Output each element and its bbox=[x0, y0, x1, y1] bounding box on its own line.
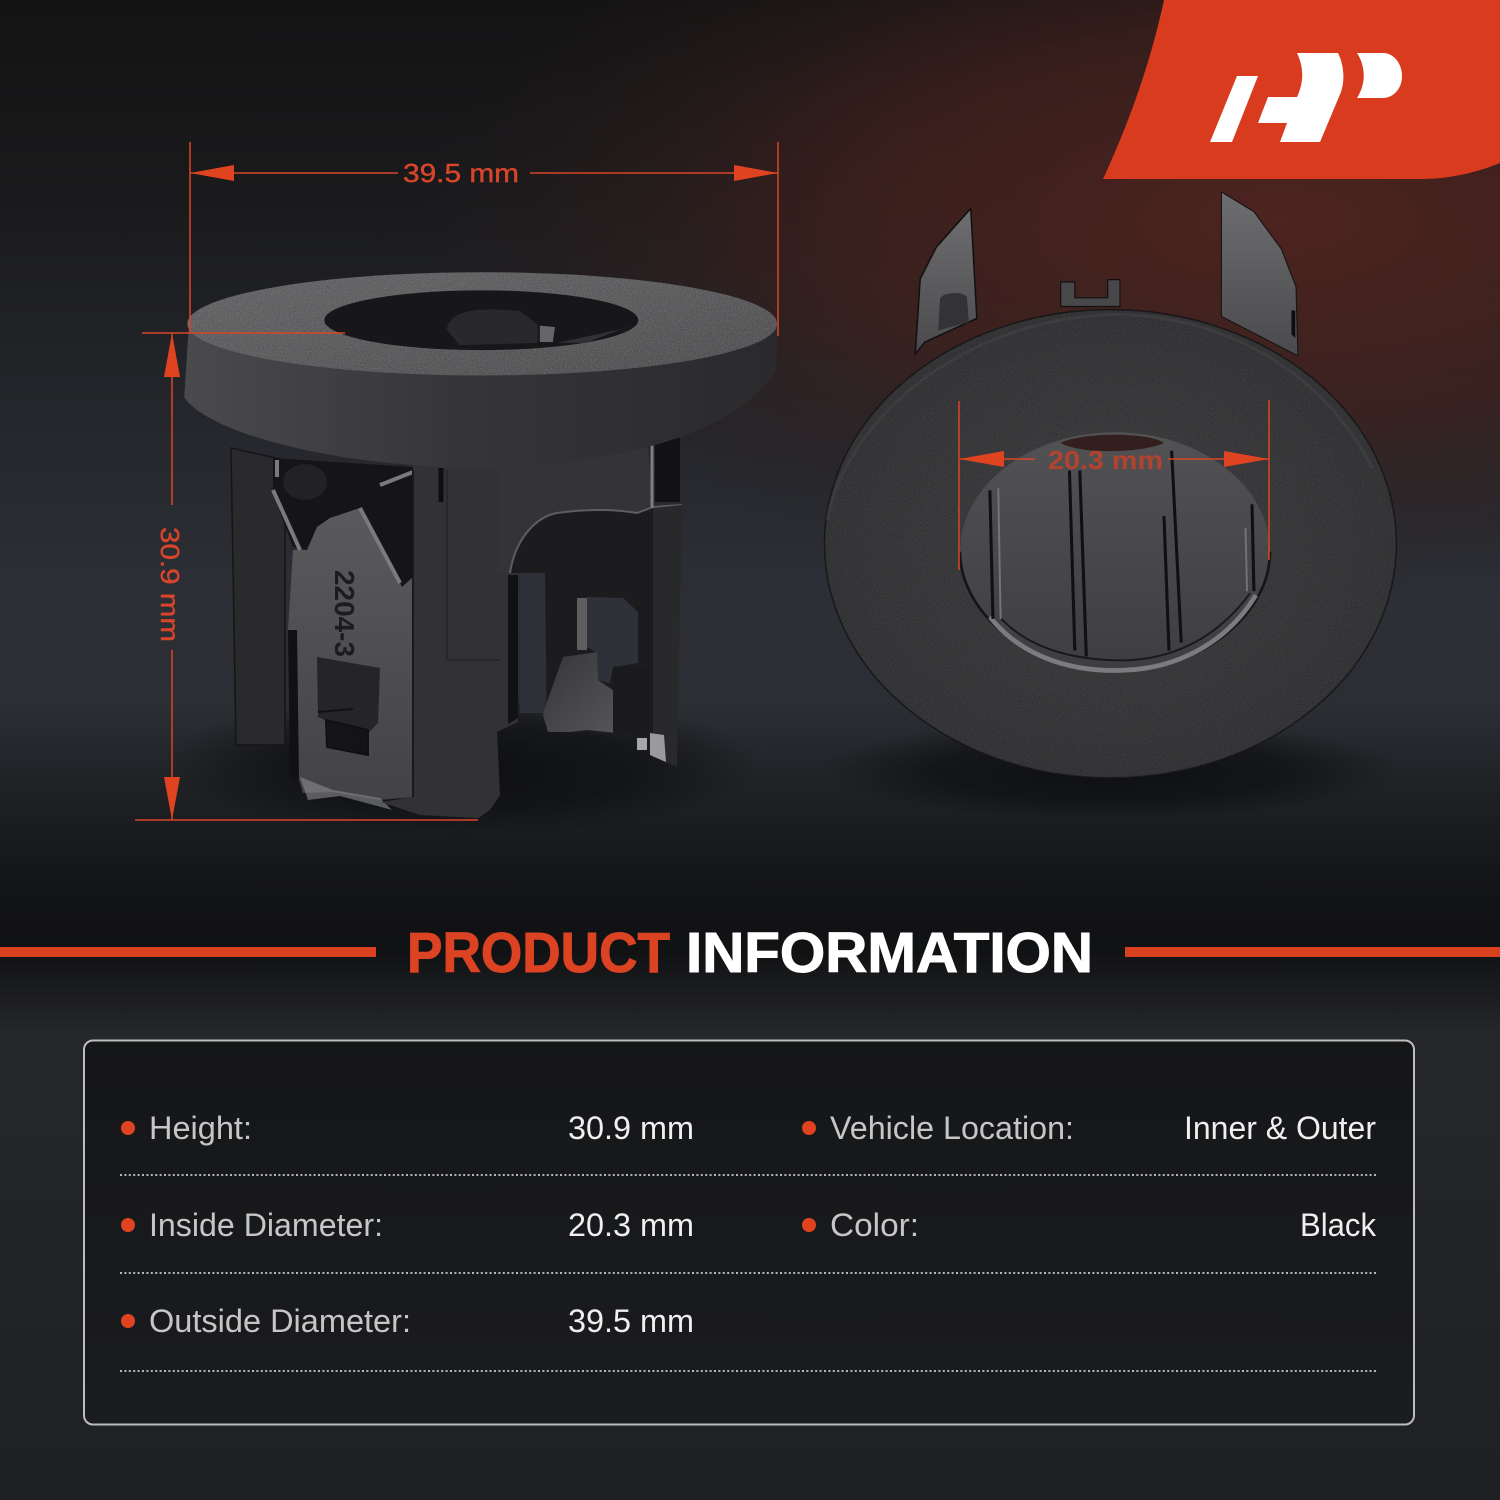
dimension: outside diameter 39.5 mm bbox=[190, 142, 778, 336]
lower rim highlight bbox=[990, 595, 1256, 671]
connector window bbox=[317, 657, 380, 755]
dimension: inside diameter 20.3 mm bbox=[959, 400, 1269, 570]
flange side bbox=[184, 329, 777, 467]
ribs bbox=[990, 451, 1254, 656]
centre opening bbox=[324, 290, 638, 350]
row: inside diameter: 20.3 mm bbox=[568, 1207, 694, 1243]
dimension: height 30.9 mm: 30.9 mm bbox=[155, 527, 185, 642]
slot background bbox=[520, 573, 545, 713]
logo tab shape bbox=[1103, 0, 1500, 179]
slit bbox=[288, 630, 299, 780]
heading: PRODUCT bbox=[407, 921, 670, 985]
dimension: height 30.9 mm bbox=[135, 333, 478, 820]
clip recess bbox=[273, 458, 413, 587]
row: vehicle location bbox=[802, 1110, 1376, 1146]
clip wires bbox=[273, 460, 413, 583]
logo mark bbox=[1210, 53, 1402, 142]
small centre pins bbox=[1061, 280, 1120, 307]
left retaining tab bbox=[915, 208, 977, 354]
row: color: Color: bbox=[830, 1207, 919, 1243]
row: vehicle location: Inner & Outer bbox=[1184, 1110, 1376, 1146]
gap at top of opening bbox=[1061, 435, 1164, 451]
ground shadow bbox=[160, 693, 760, 837]
heading rules bbox=[0, 947, 1500, 957]
heading bbox=[407, 921, 1093, 985]
front clip panel bbox=[288, 508, 415, 800]
lower metal tab bbox=[543, 652, 617, 733]
flange top bbox=[187, 272, 777, 375]
central pillar bbox=[381, 462, 518, 818]
panel: product specifications bbox=[84, 1040, 1414, 1424]
bezel opening bbox=[960, 432, 1270, 671]
row: outside diameter: Outside Diameter: bbox=[149, 1303, 411, 1339]
metal post bbox=[577, 598, 587, 650]
row: height: 30.9 mm bbox=[568, 1110, 694, 1146]
brand corner tab with logo bbox=[1103, 0, 1500, 179]
date stamp: 2204-3 bbox=[329, 570, 360, 657]
dimension: inside diameter 20.3 mm: 20.3 mm bbox=[1048, 445, 1163, 475]
row: color: Black bbox=[1300, 1207, 1377, 1243]
window background bbox=[587, 597, 638, 683]
row: outside diameter bbox=[121, 1303, 694, 1339]
dark upper box bbox=[655, 438, 680, 502]
right retaining tab bbox=[1221, 192, 1298, 356]
left wing bbox=[231, 448, 285, 745]
dimension: outside diameter 39.5 mm: 39.5 mm bbox=[403, 158, 519, 188]
right wall bbox=[653, 505, 682, 767]
row: inside diameter: Inside Diameter: bbox=[149, 1207, 383, 1243]
product photo: side view of bezel bbox=[160, 272, 777, 837]
disc bbox=[825, 310, 1396, 778]
row: height: Height: bbox=[149, 1110, 252, 1146]
row: inside diameter bbox=[121, 1207, 694, 1243]
row: outside diameter: 39.5 mm bbox=[568, 1303, 694, 1339]
product photo: front view of bezel bbox=[820, 192, 1400, 820]
upper band bbox=[498, 445, 652, 573]
bright pin ends bbox=[637, 738, 647, 750]
row: color bbox=[802, 1207, 1377, 1243]
row: height bbox=[121, 1110, 694, 1146]
heading: INFORMATION bbox=[686, 921, 1093, 985]
row: vehicle location: Vehicle Location: bbox=[830, 1110, 1074, 1146]
arch interior bbox=[510, 507, 653, 757]
